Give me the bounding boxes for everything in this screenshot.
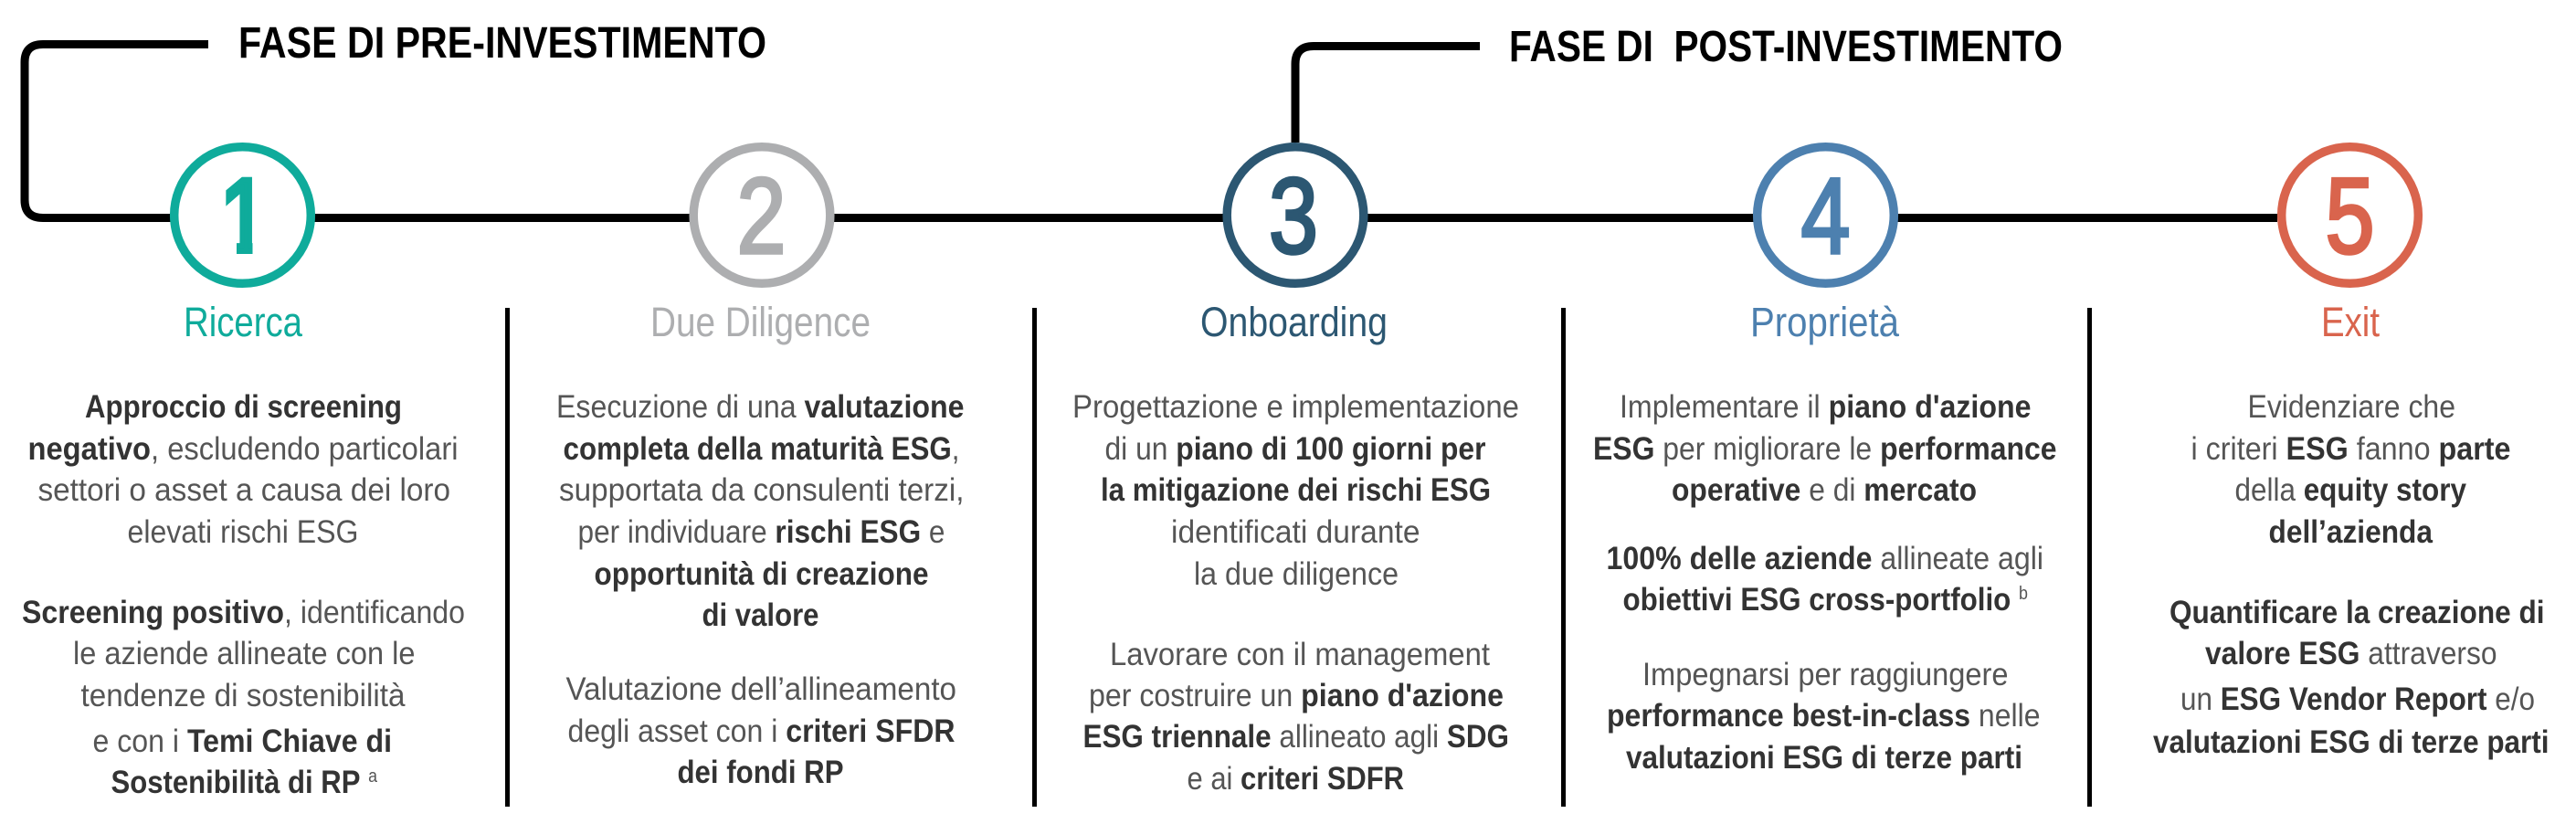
column 2 text: Due Diligence: completa della maturità ESG, (563, 431, 959, 467)
column 3 text: Onboarding: di un piano di 100 giorni per (1105, 431, 1486, 467)
column 1 text: Ricerca: le aziende allineate con le (73, 636, 415, 671)
column 4 text: Proprietà: b (2019, 584, 2028, 604)
column 1 text: Ricerca: tendenze di sostenibilità (80, 678, 406, 713)
column 1 text: Ricerca: a (368, 766, 378, 787)
column 1 text: Ricerca: elevati rischi ESG (128, 514, 358, 550)
column 3 text: Onboarding: e ai criteri SDFR (1188, 761, 1404, 797)
column 5 text: Exit: Evidenziare che (2247, 389, 2455, 425)
column 3 text: Onboarding: Lavorare con il management (1110, 637, 1490, 672)
column 1 text: Ricerca (22, 389, 465, 800)
column 5 text: Exit: un ESG Vendor Report e/o (2180, 681, 2535, 717)
column 5 text: Exit: valore ESG attraverso (2205, 636, 2497, 671)
step title: Ricerca: Ricerca (184, 299, 303, 345)
step 4 marker: 4 (1801, 156, 1851, 277)
column 5 text: Exit: dell’azienda (2269, 514, 2433, 550)
step 2 marker: 2 (736, 156, 786, 277)
timeline line with pre-investment connector (25, 44, 2277, 217)
column 3 text: Onboarding: per costruire un piano d'azione (1089, 678, 1504, 713)
column 1 text: Ricerca: e con i Temi Chiave di (93, 724, 392, 759)
column 4 text: Proprietà: Impegnarsi per raggiungere (1642, 657, 2008, 692)
column 1 text: Ricerca: Approccio di screening (85, 389, 402, 425)
column 2 text: Due Diligence: Valutazione dell’allineamento (566, 671, 956, 707)
step 1 marker (174, 147, 311, 283)
column 4 text: Proprietà: 100% delle aziende allineate agli (1606, 541, 2043, 576)
step 5 marker (2282, 147, 2418, 283)
column 4 text: Proprietà: valutazioni ESG di terze parti (1626, 740, 2022, 776)
column 3 text: Onboarding: ESG triennale allineato agli SDG (1083, 719, 1509, 755)
column 2 text: Due Diligence: supportata da consulenti terzi, (559, 472, 965, 508)
column 2 text: Due Diligence: Esecuzione di una valutazione (556, 389, 965, 425)
column 3 text: Onboarding (1072, 389, 1519, 797)
step title: Proprietà: Proprietà (1750, 299, 1900, 345)
step 1 marker: 1 (219, 157, 269, 278)
step title: Due Diligence: Due Diligence (650, 299, 871, 345)
column 1 text: Ricerca: Sostenibilità di RP (111, 765, 360, 800)
step 3 marker (1227, 147, 1364, 283)
step title: Onboarding: Onboarding (1200, 299, 1388, 345)
column 3 text: Onboarding: identificati durante (1171, 514, 1420, 550)
column 2 text: Due Diligence: opportunità di creazione (594, 556, 928, 592)
step 4 marker (1758, 147, 1894, 283)
column 4 text: Proprietà (1593, 389, 2057, 776)
heading: fase di post-investimento: FASE DI POST-INVESTIMENTO (1509, 23, 2063, 71)
heading: fase di pre-investimento: FASE DI PRE-INVESTIMENTO (238, 19, 766, 68)
column 4 text: Proprietà: ESG per migliorare le performance (1593, 431, 2057, 467)
column 4 text: Proprietà: obiettivi ESG cross-portfolio (1622, 582, 2011, 618)
step 3 marker: 3 (1269, 156, 1318, 277)
column 1 text: Ricerca: Screening positivo, identificando (22, 595, 465, 630)
step 2 marker (693, 147, 830, 283)
column 2 text: Due Diligence: per individuare rischi ESG e (577, 514, 945, 550)
column 2 text: Due Diligence: di valore (702, 597, 818, 633)
column 5 text: Exit: Quantificare la creazione di (2170, 595, 2545, 630)
column 2 text: Due Diligence: dei fondi RP (678, 755, 844, 790)
step title: Exit: Exit (2321, 299, 2380, 345)
column 3 text: Onboarding: la due diligence (1194, 556, 1399, 592)
column 4 text: Proprietà: operative e di mercato (1672, 472, 1977, 508)
column 5 text: Exit (2153, 389, 2549, 760)
connector: post-investment (1295, 46, 1480, 143)
step 5 marker: 5 (2326, 156, 2375, 277)
column 2 text: Due Diligence: degli asset con i criteri SFDR (568, 713, 955, 749)
column 1 text: Ricerca: settori o asset a causa dei loro (38, 472, 450, 508)
column dividers (505, 308, 2092, 807)
column 5 text: Exit: i criteri ESG fanno parte (2191, 431, 2510, 467)
column 3 text: Onboarding: la mitigazione dei rischi ESG (1101, 472, 1491, 508)
column 5 text: Exit: della equity story (2234, 472, 2466, 508)
column 1 text: Ricerca: negativo, escludendo particolari (27, 431, 459, 467)
column 4 text: Proprietà: Implementare il piano d'azione (1620, 389, 2032, 425)
column 4 text: Proprietà: performance best-in-class nelle (1607, 698, 2041, 734)
column 3 text: Onboarding: Progettazione e implementazione (1072, 389, 1519, 425)
column 2 text: Due Diligence (556, 389, 965, 790)
